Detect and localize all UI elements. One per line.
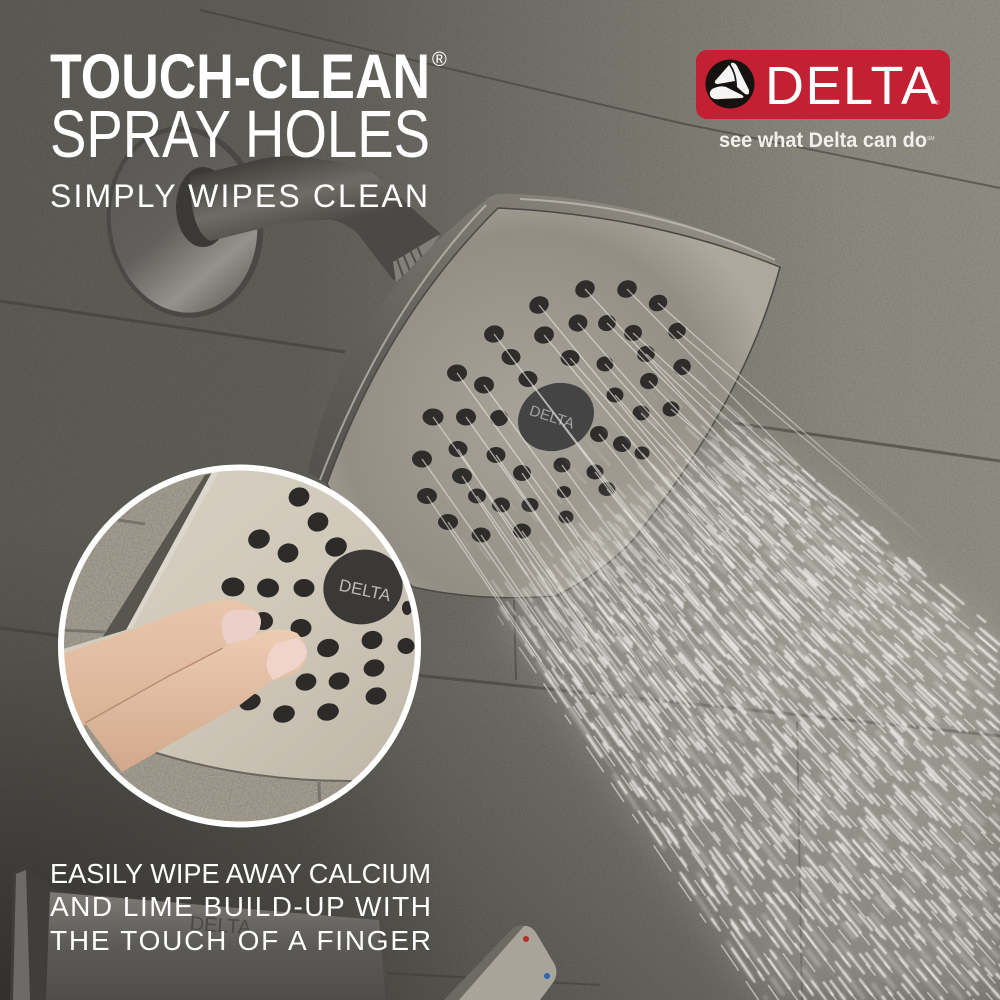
tagline: see what Delta can do: [719, 129, 927, 152]
faucet handle bottom center: [444, 925, 556, 1000]
spray body glow: [500, 423, 1000, 1000]
bright dashed water streaks: [463, 359, 1000, 1000]
logo wordmark: DELTA: [765, 56, 937, 116]
shower arm flange: [94, 116, 276, 328]
bottom caption: [50, 858, 431, 956]
title: [50, 42, 447, 214]
registered mark: ®: [432, 49, 447, 71]
fingernails: [222, 610, 307, 680]
fine water streaks: [495, 428, 995, 1000]
arm threads: [393, 234, 440, 282]
tub spout plate bottom left: [10, 868, 386, 1000]
water spray: [422, 289, 1000, 1000]
shower arm: [190, 156, 441, 282]
logo emblem: [706, 60, 754, 108]
soft wide streaks: [500, 423, 1000, 1000]
badge with logo: DELTA: [527, 402, 576, 433]
caption line 2: AND LIME BUILD-UP WITH: [50, 891, 431, 922]
fingers: [60, 600, 307, 772]
dashed water streak layers, faded in along the head edge: [463, 359, 1000, 1000]
Delta logo: [696, 50, 950, 152]
inset circle: finger wiping nozzles: [55, 460, 430, 830]
inset head bezel: [102, 473, 214, 638]
service mark on tagline: SM: [927, 136, 934, 142]
tub spout plate bottom left: DELTA: [189, 913, 253, 939]
title line: Spray Holes: SPRAY HOLES: [50, 97, 430, 172]
main shower head: [308, 194, 780, 598]
caption line 3: THE TOUCH OF A FINGER: [50, 925, 431, 956]
spray nozzles: [412, 277, 694, 542]
subtitle: SIMPLY WIPES CLEAN: [50, 178, 428, 214]
head bezel: [308, 194, 780, 597]
head face: [327, 208, 780, 598]
inset nozzles: [222, 484, 414, 725]
badge with logo: [507, 371, 605, 463]
thin streaks from nozzles: [422, 289, 960, 940]
inset tile background: [64, 472, 350, 822]
registered mark on logo: ®: [935, 100, 940, 107]
inset badge with logo: DELTA: [337, 576, 393, 605]
inset head face: [60, 470, 430, 782]
inset badge with logo: [323, 550, 403, 624]
caption line 1: EASILY WIPE AWAY CALCIUM: [50, 858, 431, 889]
title line: Touch-Clean: TOUCH-CLEAN: [50, 42, 430, 112]
